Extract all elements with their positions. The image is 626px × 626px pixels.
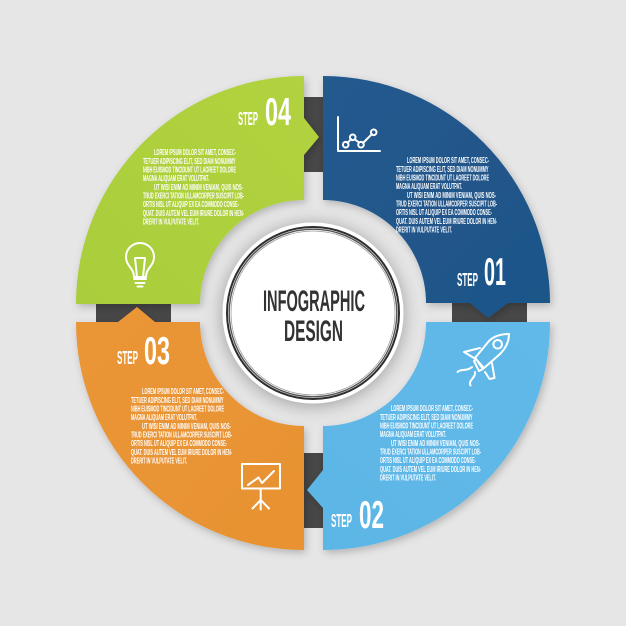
panel: step 04: QUAT. DUIS AUTEM VEL EUM IRIURE DOLOR IN HEN-: [143, 208, 244, 218]
connector bars: [96, 97, 527, 528]
panel: step 02: ORTIS NISL UT ALIQUIP EX EA COMMODO CONSE-: [380, 455, 476, 465]
panel: step 04: NIBH EUISMOD TINCIDUNT UT LAOREET DOLORE: [143, 164, 236, 174]
panel: step 03: QUAT. DUIS AUTEM VEL EUM IRIURE DOLOR IN HEN-: [131, 447, 232, 457]
panel: step 01: NIBH EUISMOD TINCIDUNT UT LAOREET DOLORE: [396, 172, 489, 182]
step 01 text: MAGNA ALIQUAM ERAT VOLUTPAT.: [396, 181, 462, 191]
icon: light bulb: [126, 243, 154, 286]
panel: step 02: [307, 322, 550, 550]
panel: step 03: TRUD EXERCI TATION ULLAMCORPER SUSCIPIT LOB-: [131, 430, 232, 440]
panel: step 03: UT WISI ENIM AD MINIM VENIAM, QUIS NOS-: [142, 421, 231, 431]
panel: step 02: NIBH EUISMOD TINCIDUNT UT LAOREET DOLORE: [380, 420, 473, 430]
step 04 text: [143, 147, 244, 226]
step 02 label: STEP: [331, 511, 352, 531]
center badge: INFOGRAPHIC: [263, 285, 365, 318]
panel: step 01: ORTIS NISL UT ALIQUIP EX EA COMMODO CONSE-: [396, 207, 492, 217]
step 04 label: STEP: [238, 109, 258, 129]
step 02 text: [380, 403, 481, 482]
step 01 text: [396, 155, 497, 234]
step 03 label: 03: [144, 330, 170, 373]
panel: step 01: UT WISI ENIM AD MINIM VENIAM, QUIS NOS-: [407, 190, 496, 200]
title: [263, 285, 365, 348]
step 02 text: MAGNA ALIQUAM ERAT VOLUTPAT.: [380, 429, 446, 439]
ring: [227, 227, 399, 399]
title: DESIGN: [284, 315, 343, 348]
step 01 label: 01: [484, 251, 506, 294]
icon: presentation board: [242, 464, 280, 510]
step 04 text: LOREM IPSUM DOLOR SIT AMET, CONSEC-: [154, 147, 236, 157]
panel: step 01: [323, 76, 550, 318]
dark blue segment: [323, 76, 550, 318]
step 01 label: STEP: [457, 270, 478, 290]
light blue segment: [307, 322, 550, 550]
center badge: [222, 222, 404, 404]
step 03 text: MAGNA ALIQUAM ERAT VOLUTPAT.: [131, 412, 197, 422]
panel: step 02: UT WISI ENIM AD MINIM VENIAM, QUIS NOS-: [391, 438, 480, 448]
step 01 text: TETUER ADIPISCING ELIT, SED DIAM NONUMMY: [396, 164, 489, 174]
icon: line chart: [338, 117, 380, 151]
step 04 label: [238, 91, 291, 134]
green segment: [76, 76, 319, 304]
step 04 text: MAGNA ALIQUAM ERAT VOLUTPAT.: [143, 173, 209, 183]
step 01 text: DRERIT IN VULPUTATE VELIT.: [396, 224, 452, 234]
white disc: [222, 222, 404, 404]
step 03 text: TETUER ADIPISCING ELIT, SED DIAM NONUMMY: [131, 395, 224, 405]
step 04 text: TETUER ADIPISCING ELIT, SED DIAM NONUMMY: [143, 156, 236, 166]
step 03 label: [117, 330, 170, 373]
step 01 label: [457, 251, 506, 294]
step 03 text: DRERIT IN VULPUTATE VELIT.: [131, 456, 187, 466]
orange segment: [76, 307, 304, 550]
step 02 label: 02: [359, 494, 384, 537]
step 02 text: TETUER ADIPISCING ELIT, SED DIAM NONUMMY: [380, 412, 473, 422]
panel: step 02: TRUD EXERCI TATION ULLAMCORPER SUSCIPIT LOB-: [380, 446, 481, 456]
step 02 label: [331, 494, 384, 537]
step 02 text: LOREM IPSUM DOLOR SIT AMET, CONSEC-: [391, 403, 473, 413]
panel: step 04: UT WISI ENIM AD MINIM VENIAM, QUIS NOS-: [154, 182, 243, 192]
panel: step 04: ORTIS NISL UT ALIQUIP EX EA COMMODO CONSE-: [143, 199, 239, 209]
panel: step 01: TRUD EXERCI TATION ULLAMCORPER SUSCIPIT LOB-: [396, 198, 497, 208]
step 04 text: DRERIT IN VULPUTATE VELIT.: [143, 216, 199, 226]
step 03 text: LOREM IPSUM DOLOR SIT AMET, CONSEC-: [142, 386, 224, 396]
step 04 label: 04: [265, 91, 291, 134]
panel: step 02: QUAT. DUIS AUTEM VEL EUM IRIURE DOLOR IN HEN-: [380, 464, 481, 474]
step 03 label: STEP: [117, 348, 138, 368]
panel: step 03: NIBH EUISMOD TINCIDUNT UT LAOREET DOLORE: [131, 404, 224, 414]
panel: step 04: [76, 76, 319, 304]
panel: step 03: ORTIS NISL UT ALIQUIP EX EA COMMODO CONSE-: [131, 438, 227, 448]
step 03 text: [131, 386, 232, 466]
panel: step 01: QUAT. DUIS AUTEM VEL EUM IRIURE DOLOR IN HEN-: [396, 216, 497, 226]
step 01 text: LOREM IPSUM DOLOR SIT AMET, CONSEC-: [407, 155, 489, 165]
step 02 text: DRERIT IN VULPUTATE VELIT.: [380, 472, 436, 482]
panel: step 03: [76, 307, 304, 550]
panel: step 04: TRUD EXERCI TATION ULLAMCORPER SUSCIPIT LOB-: [143, 190, 244, 200]
icon: rocket: [458, 334, 509, 386]
